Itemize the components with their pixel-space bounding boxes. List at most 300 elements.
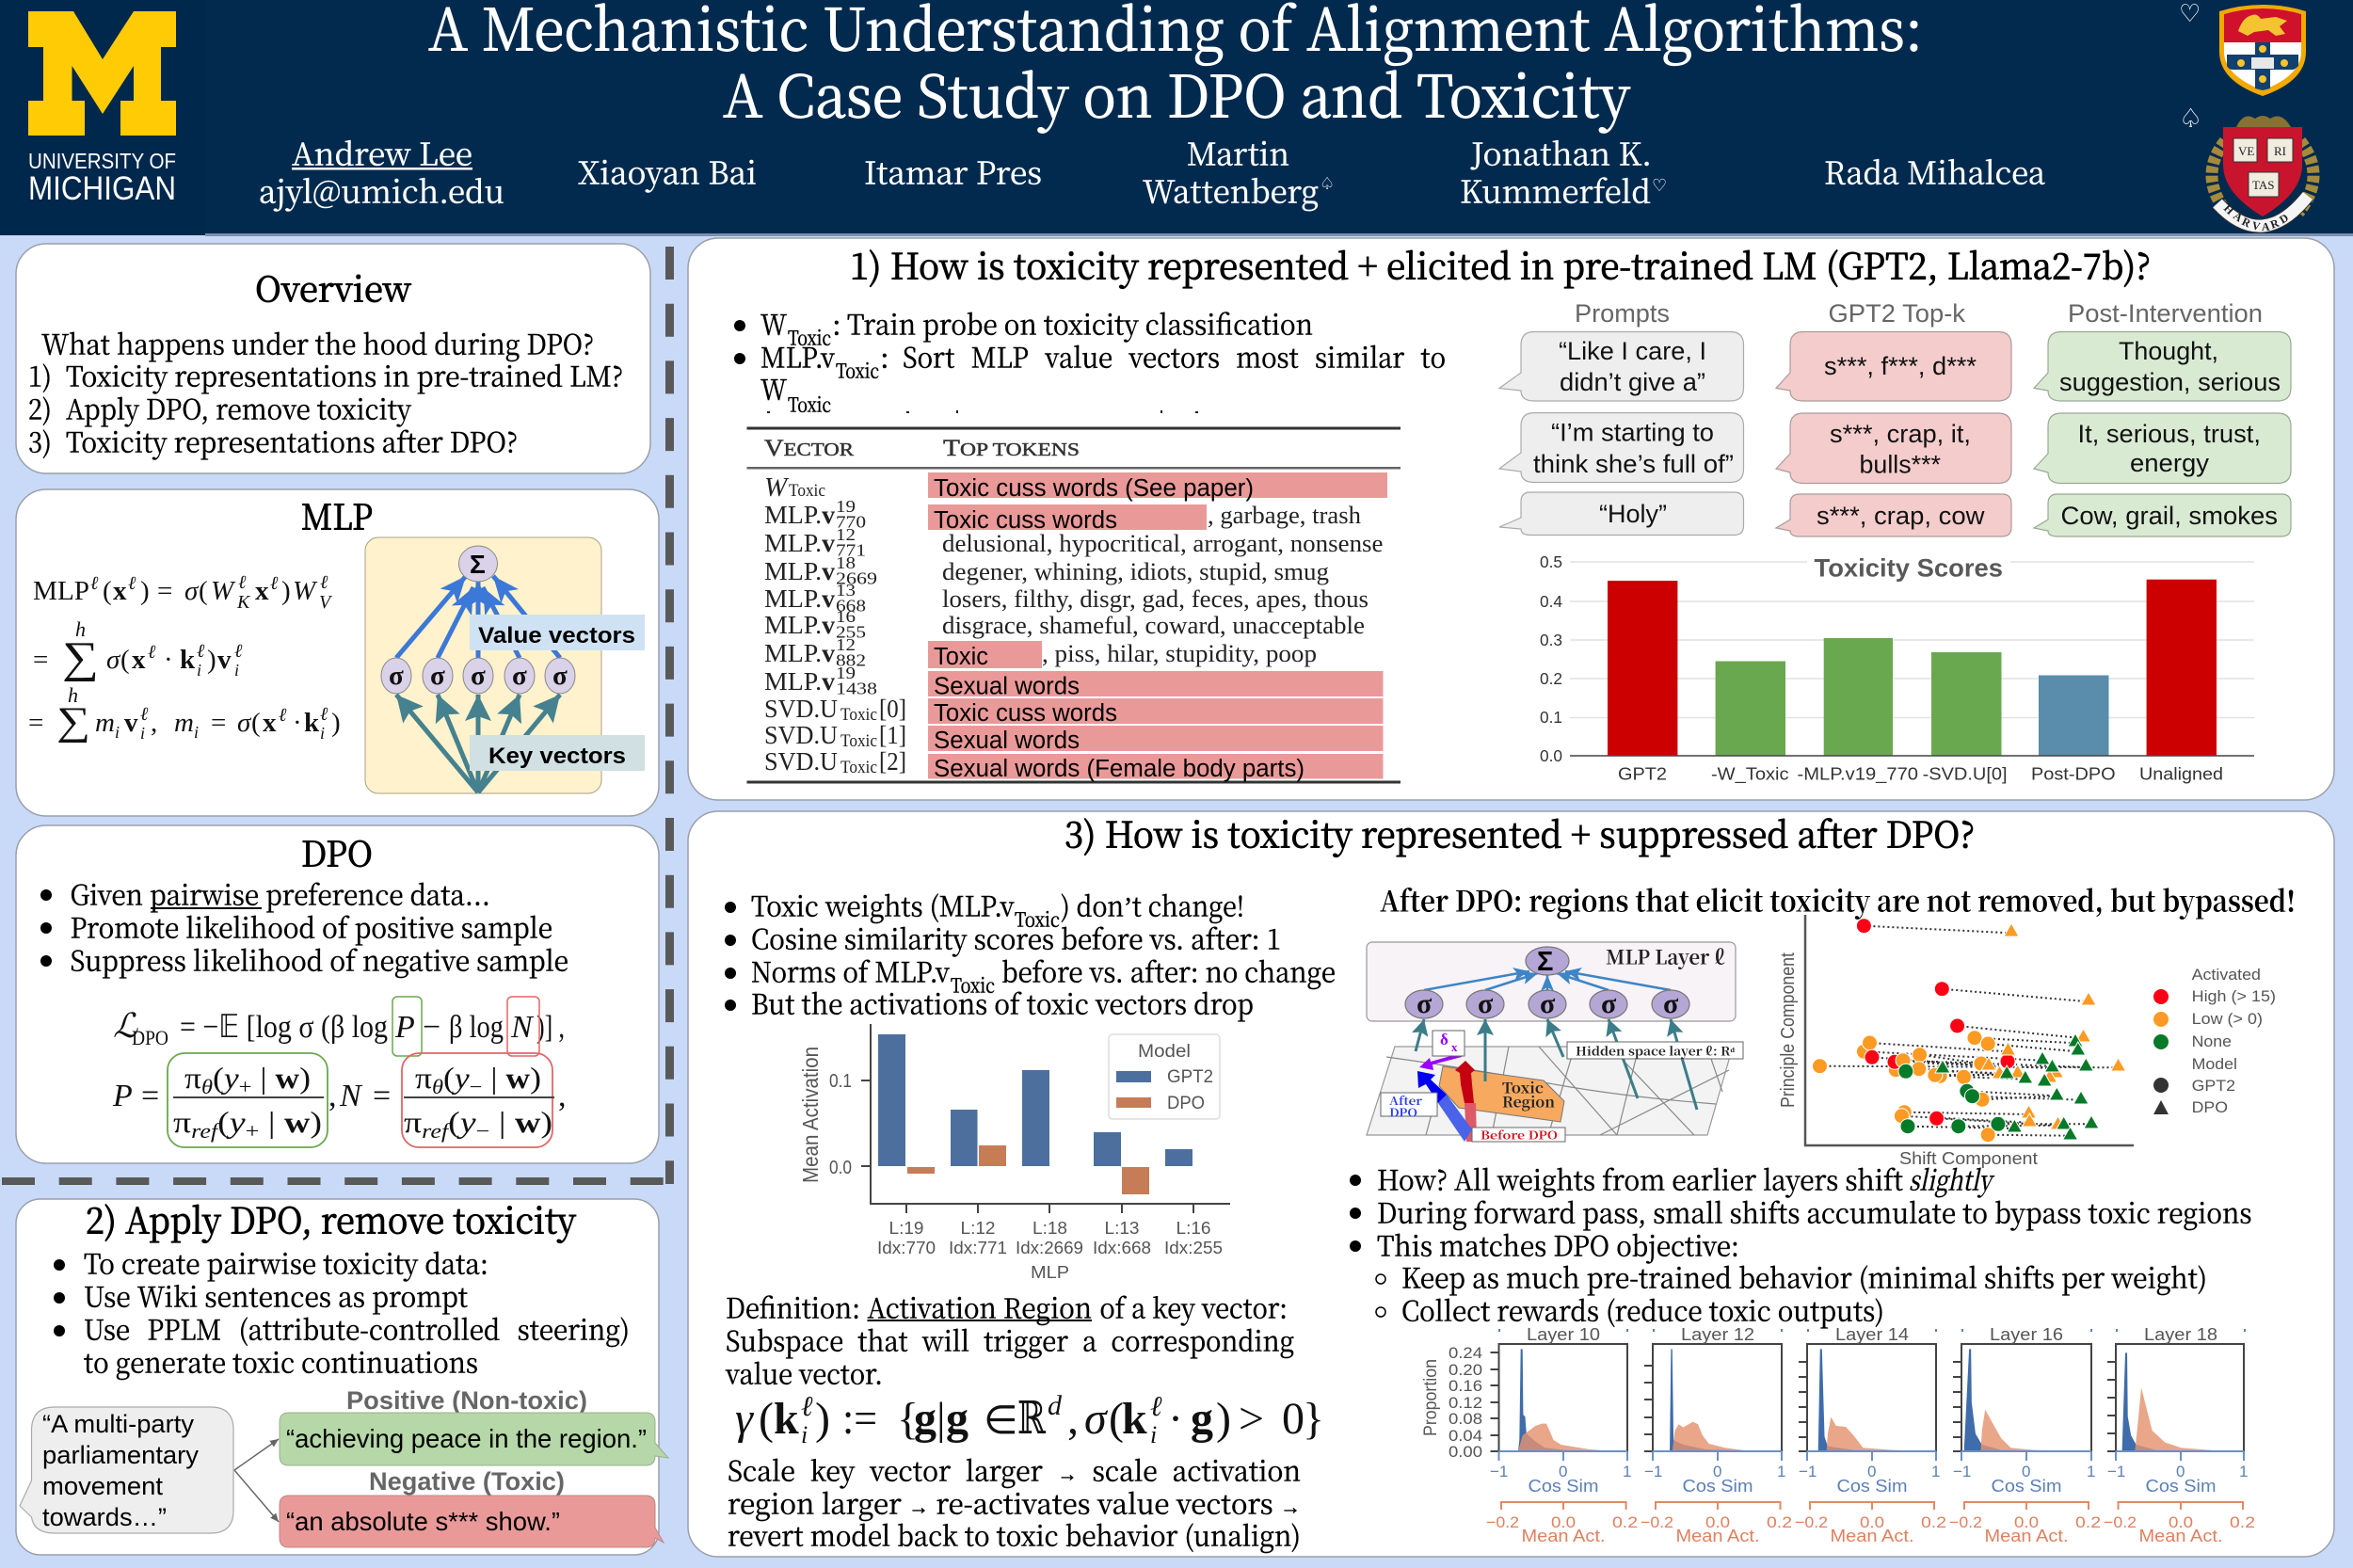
vector column: W: [764, 472, 790, 503]
text block: scale key vector: Scale key vector larger → scale activation: [728, 1449, 1301, 1489]
speech bubble: prompt: towards…”: [42, 1503, 167, 1531]
text block: section 1 bullets: MLP.v: [760, 336, 836, 376]
distribution fills: [1518, 1349, 2244, 1451]
highlight labels: Sexual words: [934, 728, 1080, 754]
text block: section 3 left bullets: But the activations of toxic vectors drop: [751, 983, 1254, 1022]
formula: activation region: |: [936, 1394, 946, 1444]
cosine similarity axis: Cos Sim: [2146, 1476, 2216, 1496]
icon: Harvard crest: [2212, 116, 2313, 233]
formula: MLP decomposition: =: [211, 708, 226, 738]
formula: MLP decomposition: i: [140, 724, 145, 743]
nodes: sigma: σ: [1601, 988, 1617, 1019]
speech bubbles: prompts: “I’m starting to: [1551, 419, 1714, 447]
icon: Harvard crest: RI: [2274, 144, 2286, 158]
mean activation axis: −0.2: [1949, 1513, 1982, 1531]
formula: DPO loss: |: [251, 1061, 275, 1095]
formula: MLP decomposition: ℓ: [320, 704, 328, 725]
tokens column: disgrace, shameful, coward, unacceptable: [942, 612, 1365, 639]
text block: section 1 bullets: W: [760, 368, 787, 408]
label: delta x: δ: [1440, 1031, 1449, 1048]
nodes: sigma activations: σ: [430, 661, 445, 691]
formula: DPO loss: +: [246, 1119, 259, 1143]
formula: DPO loss: β log: [449, 1010, 504, 1045]
icon: heart affiliation mark: ♡: [2179, 0, 2201, 27]
text block: section 3 left bullets: ) don’t change!: [1061, 885, 1244, 924]
legend: DPO: [2192, 1098, 2228, 1116]
y axis labels: 0.24: [1449, 1344, 1482, 1362]
axis labels: Principle Component: [1778, 952, 1799, 1108]
text block: section 1 bullets: Toxic: [788, 323, 831, 351]
axis labels: [798, 1047, 1223, 1282]
text block: overview questions: [28, 323, 623, 460]
formula: activation region: ,: [1067, 1394, 1079, 1444]
text block: section 1 bullets: :: [832, 303, 841, 343]
pink highlight bars: [928, 472, 1387, 779]
cosine similarity axis: −1: [2107, 1463, 2125, 1480]
subplot titles: Layer 14: [1835, 1325, 1909, 1344]
table: vector top tokens: [747, 410, 1401, 783]
icon: Harvard crest: TAS: [2252, 178, 2275, 192]
panel: 3) after DPO: [688, 806, 2334, 1557]
text block: activation region definition: Subspace that will trigger a corresponding: [726, 1320, 1294, 1359]
vector column: [1]: [879, 721, 906, 749]
vector column: MLP.v: [764, 557, 836, 585]
formula: DPO loss: w): [275, 1061, 310, 1095]
y axis labels: 0.0: [1540, 746, 1562, 765]
formula: activation region: ∈: [984, 1400, 1018, 1443]
text block: activation region definition: [725, 1287, 1294, 1392]
points: GPT2 circles: [1813, 919, 2015, 1143]
speech bubbles: prompts: think she’s full of”: [1533, 450, 1734, 478]
formula: activation region: ): [815, 1394, 830, 1444]
formula: DPO loss: N: [510, 1010, 535, 1045]
formula: activation region: (: [1109, 1394, 1124, 1444]
formula: DPO loss: |: [482, 1061, 505, 1095]
text block: section 3 left bullets: Toxic weights (MLP.v: [751, 885, 1015, 924]
arrows: value vectors: [396, 576, 560, 658]
x axis labels: -W_Toxic: [1711, 764, 1788, 785]
nodes: sigma activations: σ: [512, 661, 527, 691]
legend: Low (> 0): [2192, 1010, 2263, 1028]
tokens column: losers, filthy, disgr, gad, feces, apes, thous: [942, 585, 1369, 613]
vector column: Toxic: [789, 481, 825, 501]
panel: DPO: [16, 825, 659, 1163]
tokens column: , garbage, trash: [1208, 502, 1361, 529]
vector column: MLP.v: [764, 611, 836, 639]
formula: activation region: >: [1239, 1394, 1264, 1444]
author: Andrew Lee: [259, 130, 504, 212]
formula: DPO loss: π: [184, 1061, 200, 1095]
formula: MLP decomposition: v: [217, 645, 232, 675]
formula: MLP decomposition: W: [211, 576, 236, 606]
y axis labels: 0.00: [1449, 1443, 1482, 1461]
axis labels: L:12: [960, 1218, 996, 1238]
text block: section 3 left bullets: Cosine similarity scores before vs. after: 1: [751, 918, 1281, 957]
formula: activation region: ℝ: [1017, 1392, 1046, 1445]
nodes: sigma activations: σ: [552, 661, 568, 691]
y ticks: [1491, 1352, 2116, 1451]
formula: DPO loss: −: [423, 1010, 440, 1045]
formula: DPO loss: (: [213, 1061, 224, 1095]
axis labels: MLP: [1031, 1262, 1069, 1282]
nodes: sigma: [1405, 988, 1689, 1019]
x axis labels: -MLP.v19_770: [1798, 764, 1918, 785]
formula: DPO loss: y: [226, 1105, 247, 1139]
formula: activation region: {: [897, 1394, 919, 1444]
speech bubbles: post-intervention: energy: [2130, 449, 2210, 477]
mean activation axis: 0.0: [2014, 1513, 2039, 1531]
mean activation axis: Mean Act.: [1984, 1526, 2069, 1545]
x axis labels: Unaligned: [2139, 764, 2223, 784]
speech bubbles: post-intervention: Cow, grail, smokes: [2061, 502, 2278, 530]
icon: Harvard crest: A: [2262, 220, 2270, 233]
mean activation axis: −0.2: [2104, 1513, 2137, 1531]
cosine similarity axis: Cos Sim: [1837, 1476, 1907, 1496]
text block: section 1 bullets: Sort MLP value vectors most similar to: [903, 336, 1446, 376]
formula: activation region: i: [801, 1421, 808, 1448]
speech bubble: positive continuation: [280, 1413, 668, 1465]
vector column: SVD.U: [764, 747, 838, 776]
mean activation axis: 0.0: [1860, 1513, 1884, 1531]
cosine similarity axis: 0: [1867, 1463, 1876, 1480]
panel: 2) apply DPO: [16, 1192, 668, 1555]
formula: MLP decomposition: h: [75, 617, 86, 641]
nodes: sigma: σ: [1540, 988, 1556, 1019]
text block: overview questions: 2): [28, 388, 52, 427]
vector column: MLP.v: [764, 501, 836, 529]
formula: DPO loss: π: [415, 1061, 430, 1095]
tokens column: [942, 502, 1384, 667]
formula: DPO loss: ,: [328, 1079, 337, 1113]
speech bubbles: prompts: “Holy”: [1599, 500, 1667, 528]
formula: DPO loss: θ: [432, 1075, 443, 1098]
formula: DPO loss: −: [476, 1119, 489, 1143]
formula: activation region: g: [1191, 1394, 1213, 1444]
speech bubble: prompt: [20, 1407, 233, 1533]
heading: overview: Overview: [255, 261, 411, 312]
bars: GPT2: [878, 1034, 1193, 1166]
formula: MLP decomposition: V: [319, 592, 333, 613]
label: key vectors: [470, 735, 645, 771]
vector column: 882: [836, 651, 866, 670]
nodes: sigma activations: σ: [471, 661, 486, 691]
formula: MLP decomposition: [28, 572, 341, 744]
formula: DPO loss: = −𝔼 [log σ (β log: [180, 1010, 388, 1045]
vector column: 19: [836, 664, 856, 682]
formula: MLP decomposition: σ: [184, 576, 200, 606]
formula: MLP decomposition: ℓ: [320, 572, 328, 593]
legend: [2153, 966, 2276, 1116]
formula: MLP decomposition: ·: [164, 645, 173, 675]
axis labels: Idx:771: [949, 1238, 1007, 1257]
icon: University of Sydney crest: [2219, 5, 2306, 96]
vector column: 13: [836, 581, 856, 600]
formula: MLP decomposition: ℓ: [197, 641, 205, 662]
text block: section 3 right bullets: Keep as much pre-trained behavior (minimal shifts per weight): [1401, 1256, 2207, 1296]
icon: Harvard crest: R: [2240, 215, 2253, 231]
speech bubbles: GPT2 top-k: s***, f***, d***: [1824, 352, 1977, 380]
y axis labels: 0.3: [1540, 631, 1562, 649]
legend: GPT2: [2192, 1077, 2235, 1095]
formula: DPO loss: )] ,: [536, 1010, 565, 1045]
vector column: Toxic: [840, 731, 877, 751]
vector column: 18: [836, 553, 856, 572]
mean activation axis: 0.2: [2230, 1513, 2255, 1531]
text block: scale key vector: revert model back to toxic behavior (unalign): [728, 1514, 1301, 1554]
points: DPO triangles: [1935, 923, 2126, 1140]
axis labels: 0.1: [829, 1071, 852, 1092]
panel: 1) toxicity representation: [688, 237, 2334, 800]
formula: DPO loss: y: [456, 1105, 477, 1139]
formula: DPO loss: π: [404, 1105, 419, 1139]
bars: [1608, 580, 2217, 756]
nodes: sigma activations: [381, 658, 575, 694]
author: Jonathan K. Kummerfeld: ♡: [1652, 176, 1667, 195]
mean activation axis: 0.2: [1612, 1513, 1638, 1531]
formula: DPO loss: w): [505, 1061, 540, 1095]
axes: [1805, 915, 2134, 1145]
mean activation axis: 0.0: [1551, 1513, 1576, 1531]
label: positive: Positive (Non-toxic): [346, 1386, 587, 1415]
axis labels: Idx:255: [1164, 1238, 1223, 1257]
author: Martin Wattenberg: [1143, 130, 1335, 212]
mean activation axis: −0.2: [1795, 1513, 1828, 1531]
text block: DPO bullets: Given pairwise preference data...: [70, 873, 490, 913]
text block: section 1 bullets: Toxic: [788, 390, 831, 418]
y axis labels: 0.08: [1449, 1410, 1482, 1428]
icon: Harvard crest: D: [2277, 211, 2291, 227]
vector column: [0]: [879, 695, 906, 723]
icon: Harvard crest: VE: [2238, 144, 2254, 158]
legend: [1109, 1034, 1220, 1119]
text block: section 1 bullets: [734, 303, 1446, 418]
vector column: SVD.U: [764, 695, 838, 723]
label: hidden space: Hidden space layer ℓ: Rᵈ: [1576, 1042, 1735, 1059]
text block: scale key vector: region larger → re-activates value vectors →: [728, 1482, 1301, 1522]
cosine similarity axis: Cos Sim: [1529, 1476, 1598, 1496]
diagram: toxic region bypass: [1367, 942, 1743, 1143]
formula: DPO loss: w): [515, 1105, 551, 1139]
formula: DPO loss: ref: [191, 1119, 221, 1143]
formula: MLP decomposition: =: [157, 576, 172, 606]
axis labels: Mean Activation: [798, 1047, 823, 1183]
formula: DPO loss: P: [394, 1010, 415, 1045]
hidden space plane: [1367, 1047, 1733, 1135]
formula: MLP decomposition: k: [180, 645, 196, 675]
text block: DPO bullets: [40, 873, 568, 979]
arrow: delta shift: [1419, 1053, 1462, 1070]
cosine similarity axis: −1: [1490, 1463, 1508, 1480]
label: key vectors: Key vectors: [488, 744, 626, 769]
toxic region: Toxic: [1502, 1077, 1544, 1097]
vector column: MLP.v: [764, 529, 836, 557]
y axis labels: 0.4: [1540, 592, 1562, 611]
y axis labels: 0.20: [1449, 1361, 1482, 1379]
axis labels: [1778, 952, 2038, 1168]
formula: DPO loss: ℒ: [113, 1007, 138, 1045]
formula: activation region: :=: [842, 1394, 877, 1444]
panel: overview: [16, 244, 650, 473]
formula: activation region: d: [1048, 1390, 1063, 1421]
formula: MLP decomposition: ∑: [62, 633, 99, 682]
highlight labels: Sexual words: [934, 674, 1080, 700]
author: Martin Wattenberg: Wattenberg: [1143, 168, 1319, 212]
text block: section 1 bullets: Toxic: [836, 356, 879, 384]
text block: activation region definition: Activation Region: [868, 1287, 1092, 1326]
highlight labels: [934, 475, 1305, 782]
cosine similarity axis: −1: [1644, 1463, 1662, 1480]
text block: section 2 bullets: Use PPLM (attribute-controlled steering): [84, 1308, 630, 1348]
formula: MLP decomposition: ℓ: [279, 705, 287, 726]
axis labels: 0.0: [829, 1158, 852, 1178]
arrow: to negative: [234, 1470, 279, 1522]
formula: MLP decomposition: σ: [106, 645, 121, 675]
text block: section 3 right bullets: [1350, 1159, 2251, 1329]
subplot titles: [1498, 1325, 2246, 1344]
formula: activation region: ·: [1168, 1394, 1183, 1444]
formula: MLP decomposition: W: [293, 576, 318, 606]
vector column: 12: [836, 525, 856, 544]
arrows: blue outputs: [1424, 971, 1671, 990]
formula: DPO loss: y: [452, 1061, 471, 1095]
text block: section 2 bullets: To create pairwise toxicity data:: [84, 1242, 488, 1282]
y axis labels: Proportion: [1421, 1359, 1441, 1436]
vector column: [764, 472, 906, 777]
axis labels: L:18: [1032, 1218, 1067, 1238]
heading: MLP: MLP: [301, 488, 373, 539]
text block: section 1 bullets: :: [880, 336, 889, 376]
formula: DPO loss: (: [217, 1105, 230, 1139]
formula: activation region: }: [1303, 1394, 1324, 1444]
speech bubble: positive continuation: “achieving peace in the region.”: [286, 1424, 647, 1453]
y axis labels: 0.04: [1449, 1427, 1482, 1445]
formula: MLP decomposition: ℓ: [148, 642, 156, 663]
vector column: 19: [836, 497, 856, 516]
text block: section 3 left bullets: before vs. after: no change: [1001, 951, 1336, 990]
chart title: Toxicity Scores: [1815, 553, 2003, 582]
speech bubbles: GPT2 top-k: [1776, 331, 2011, 536]
cosine similarity axis: Cos Sim: [1683, 1476, 1753, 1496]
legend: DPO: [1167, 1094, 1205, 1113]
text block: section 3 right bullets: How? All weights from earlier layers shift: [1377, 1159, 1903, 1198]
mean activation axis: −0.2: [1486, 1513, 1519, 1531]
icon: Harvard crest: A: [2231, 209, 2246, 225]
mean activation axis: 0.0: [1705, 1513, 1730, 1531]
formula: DPO loss: P: [112, 1079, 133, 1113]
label: delta x: [1433, 1031, 1465, 1056]
mean activation axis: −0.2: [1641, 1513, 1673, 1531]
formula: MLP decomposition: i: [115, 723, 120, 742]
cosine similarity axis: Cos Sim: [1992, 1476, 2061, 1496]
formula: MLP decomposition: ): [281, 576, 291, 606]
label: delta x: x: [1451, 1040, 1458, 1054]
formula: DPO loss: π: [173, 1105, 188, 1139]
x axis labels: GPT2: [1618, 764, 1667, 784]
y axis labels: 0.1: [1540, 708, 1562, 727]
formula: DPO loss: w): [284, 1105, 320, 1139]
author: Xiaoyan Bai: Xiaoyan Bai: [578, 149, 757, 193]
formula: MLP decomposition: =: [33, 645, 48, 675]
legend: Activated: [2192, 966, 2261, 984]
cosine similarity axis: −1: [1953, 1463, 1971, 1480]
text block: section 3 right bullets: slightly: [1909, 1159, 1995, 1198]
formula: DPO loss: +: [239, 1075, 251, 1098]
highlight labels: Toxic cuss words (See paper): [934, 475, 1254, 502]
axis labels: Idx:668: [1093, 1238, 1151, 1257]
formula: MLP decomposition: i: [197, 661, 201, 680]
author: Andrew Lee: ajyl@umich.edu: [259, 168, 504, 212]
author: Rada Mihalcea: Rada Mihalcea: [1824, 149, 2046, 193]
text block: overview questions: Apply DPO, remove toxicity: [66, 388, 412, 427]
formula: MLP decomposition: x: [255, 576, 269, 606]
axis labels: L:16: [1176, 1218, 1210, 1238]
bar chart: toxicity scores: [1540, 552, 2254, 785]
column headings: prompts table: Prompts: [1575, 299, 1670, 328]
highlight labels: Sexual words (Female body parts): [934, 756, 1305, 782]
formula: MLP decomposition: i: [194, 723, 199, 742]
x axis labels: Post-DPO: [2031, 764, 2116, 784]
text block: section 3 left bullets: [725, 885, 1336, 1022]
mean activation axis: 0.2: [1921, 1513, 1946, 1531]
speech bubble: negative continuation: “an absolute s*** show.”: [286, 1507, 560, 1536]
text block: activation region definition: Definition:: [726, 1287, 860, 1326]
arrow: after DPO activation: [1417, 1071, 1472, 1142]
mean activation axis: Mean Act.: [2138, 1526, 2223, 1545]
formula: MLP decomposition: =: [28, 708, 43, 738]
speech bubbles: GPT2 top-k: bulls***: [1860, 450, 1941, 478]
mean activation axis: 0.2: [1767, 1513, 1792, 1531]
vector column: [2]: [879, 747, 906, 776]
formula: activation region: i: [1150, 1421, 1157, 1448]
axes: [861, 1024, 1230, 1213]
column headings: prompts table: [1575, 299, 2263, 328]
bar chart: mean activation: [798, 1024, 1230, 1282]
arrows: key vectors: [396, 695, 560, 792]
text block: overview questions: Toxicity representations after DPO?: [66, 421, 518, 460]
arrow: to positive: [234, 1439, 279, 1470]
formula: DPO loss: (: [443, 1061, 455, 1095]
formula: DPO loss: y: [221, 1061, 240, 1095]
title: [428, 0, 1923, 134]
vector column: 2669: [836, 568, 877, 587]
formula: activation region: k: [774, 1394, 799, 1444]
formula: activation region: 0: [1282, 1394, 1305, 1444]
formula: MLP decomposition: ,: [151, 708, 157, 738]
text block: section 2 bullets: Use Wiki sentences as prompt: [84, 1275, 468, 1315]
text block: overview questions: What happens under the hood during DPO?: [41, 323, 594, 362]
formula: MLP decomposition: v: [124, 708, 138, 738]
icon: spade affiliation mark: ♤: [2179, 104, 2202, 134]
vector column: 668: [836, 597, 866, 616]
heading: DPO: DPO: [301, 825, 373, 876]
cosine similarity axis: 1: [2087, 1463, 2095, 1480]
text block: section 1 bullets: Train probe on toxicity classification: [847, 303, 1313, 343]
table header: VECTOR: [764, 436, 855, 461]
text block: overview questions: 3): [28, 421, 52, 460]
author: Jonathan K. Kummerfeld: [1460, 130, 1667, 212]
x axis labels: [1618, 764, 2223, 785]
author: Jonathan K. Kummerfeld: Jonathan K.: [1470, 130, 1652, 174]
legend: High (> 15): [2192, 987, 2276, 1005]
speech bubbles: post-intervention: suggestion, serious: [2059, 368, 2281, 396]
formula: MLP decomposition: ℓ: [90, 573, 99, 594]
text block: activation region definition: of a key vector:: [1099, 1287, 1288, 1326]
vector column: Toxic: [840, 705, 877, 725]
formula: DPO loss: DPO: [132, 1026, 168, 1049]
tokens column: degener, whining, idiots, stupid, smug: [942, 558, 1329, 585]
formula: MLP decomposition: ℓ: [128, 573, 136, 594]
formula: DPO loss: [112, 997, 567, 1147]
